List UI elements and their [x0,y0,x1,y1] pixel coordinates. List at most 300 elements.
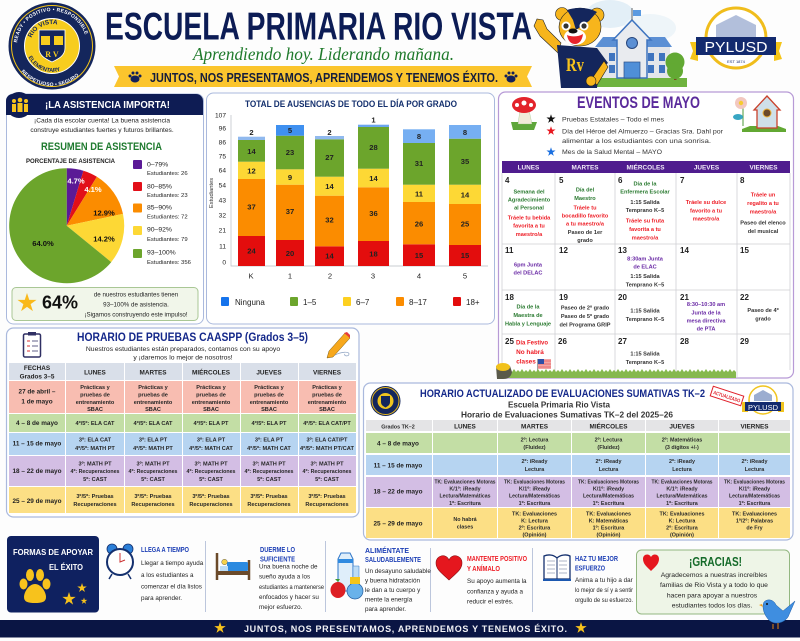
stacked bar 1 [276,125,304,266]
CAASPP row: 11-15 mayo: 4º/5º: MATH PT [75,446,115,452]
y axis: 54 [219,182,226,190]
stacked bar 5: 14 [461,190,470,200]
CAASPP row: 27 abril: Prácticas y [254,385,285,391]
events day 4: favorita a tu [513,224,545,230]
banner: JUNTOS, NOS PRESENTAMOS, APRENDEMOS Y TENEMOS ÉXITO. [150,70,498,85]
district logo [690,8,782,68]
stacked bar 5: 8 [463,128,467,137]
TK-2 row: 18-22 mayo: 18 – 22 de mayo [373,488,423,496]
icon: pencil [327,332,350,358]
icon: milk and apple [330,553,363,599]
pie legend: 0–79% [147,162,168,168]
events day 25: Día Festivo [516,340,548,346]
CAASPP row: 11-15 mayo: 3º: ELA PT [139,438,168,444]
events day 6: favorita a tu [629,227,661,233]
stacked bar K: 24 [247,246,256,256]
TK-2 row: 18-22 mayo: 1º: Escritura [666,501,699,507]
stacked bar K: 2 [249,128,254,137]
CAASPP row: 11-15 mayo: 4º/5º: MATH CAT [189,446,233,452]
TK-2 row: 11-15 mayo: Lectura [599,467,619,473]
TK-2 row: 18-22 mayo: Lectura/Matemáticas [656,494,708,500]
TK-2 row: 11-15 mayo: Lectura [525,467,545,473]
TK-2 row: 18-22 mayo: TK: Evaluaciones Motoras [724,480,785,486]
CAASPP row: 27 abril: entrenamiento [76,400,115,406]
events day 6: Día de la [633,182,657,188]
events day 5: Maestro [574,196,596,202]
TK-2 row: 25-29 mayo: K: Lectura [669,518,696,524]
pie chart: 4.1% [84,185,102,194]
TK-2 row: 25-29 mayo: 1º: Escritura [593,526,625,532]
mascot [534,8,608,88]
CAASPP row: 27 abril: pruebas de [138,392,168,398]
TK-2 header row: Grados TK–2 [381,424,415,430]
stacked bar K: 14 [247,147,256,156]
events day 13: de ELAC [633,264,657,270]
CAASPP row: 18-22 mayo: 5º: CAST [83,477,107,483]
CAASPP subtitle: Nuestros estudiantes están preparados, contamos con su apoyo [86,346,280,353]
events day 8: Paseo del elenco [740,220,786,226]
day numbers: 8 [740,176,745,185]
tip: eat healthy: mente la energía [365,596,413,604]
day numbers: 6 [618,176,623,185]
CAASPP header row [20,365,342,380]
CAASPP row: 25-29 mayo [12,494,349,508]
CAASPP row: 18-22 mayo: 3º: MATH PT [194,462,228,468]
events day 7: favorito a tu [690,208,723,214]
stacked bar 5 [449,125,481,266]
pie legend: 80–85% [147,184,172,190]
CAASPP row: 25-29 mayo: 3º/5º: Pruebas [308,494,346,500]
stacked bar 4: 15 [415,251,424,260]
tip: best effort: HAZ TU MEJOR [575,556,618,563]
stacked bar 3: 28 [369,143,378,152]
CAASPP row: 25-29 mayo: Recuperaciones [131,502,175,508]
small district logo: PYLUSD [748,403,779,412]
CAASPP row: 27 abril: entrenamiento [134,400,173,406]
events day 20 [626,308,664,323]
CAASPP row: 27 abril: entrenamiento [250,400,289,406]
CAASPP row: 18-22 mayo: 3º: MATH PT [310,462,344,468]
tip: stay positive: MANTENTE POSITIVO [467,556,527,563]
CAASPP row: 27 abril: Prácticas y [312,385,343,391]
TK-2 row: 25-29 mayo: TK: Evaluaciones [660,512,704,518]
events day 6: Enfermera Escolar [620,190,671,196]
CAASPP row: 18-22 mayo: 4º: Recuperaciones [302,469,352,475]
stacked bar 3: 14 [369,174,378,183]
TK-2 row: 18-22 mayo: K/1º: iReady [593,486,624,492]
stacked bar 4: 31 [415,159,424,168]
day numbers: 15 [740,246,749,255]
CAASPP row: 27 abril: SBAC [319,407,335,413]
events list: Día del Héroe del Almuerzo – Gracias Sra. Dahl por [562,128,724,136]
TK-2 header row: JUEVES [669,424,695,430]
callout: 64 percent: ¡Sigamos construyendo este impulso! [84,312,188,318]
stacked bar 5: 25 [461,220,470,228]
CAASPP row: 11-15 mayo [13,438,355,452]
panel: thanks: ¡GRACIAS! [689,555,742,569]
pie chart: 12.9% [93,208,115,218]
events day 7: Tráele su dulce [686,200,726,206]
panel: thanks: hacen para apoyar a nuestros [667,592,758,600]
tip: best effort [543,555,633,604]
tip: stay positive: Y ANÍMALO [467,564,500,573]
tip: on time: LLEGA A TIEMPO [141,547,189,554]
stacked bar 1: 37 [286,207,294,216]
CAASPP row: 27 abril: SBAC [203,407,219,413]
TK-2 row: 18-22 mayo: TK: Evaluaciones Motoras [578,480,639,486]
calendar: VIERNES [749,164,778,172]
calendar: JUEVES [694,164,720,172]
small district logo [742,386,784,414]
events day 25: clases [516,358,536,366]
events day 6: Temprano K–5 [626,208,664,214]
x axis labels: K [248,272,254,280]
events day 8 [740,192,786,235]
small school logo [370,386,400,416]
CAASPP row: 4-8 mayo: 4º/5º: ELA PT [194,421,229,427]
day numbers: 21 [680,293,689,302]
CAASPP header row: Grados 3–5 [20,374,55,380]
icon: open book [543,555,571,581]
TK-2 row: 11-15 mayo: Lectura [672,467,693,473]
stacked bar 1: 20 [286,249,294,258]
CAASPP row: 27 abril: 1 de mayo [21,398,53,406]
events day 19: Paseo de 5º grado [561,314,610,320]
school logo: ELEMENTARY [28,56,60,72]
tip: sleep: SUFICIENTE [260,556,295,564]
day numbers: 27 [618,337,627,346]
chart legend: 1–5 [303,298,317,307]
y axis: Estudiantes [209,178,215,208]
events day 25: No habrá [516,349,544,356]
TK-2 header row: LUNES [454,424,477,430]
CAASPP row: 18-22 mayo [12,462,352,483]
events day 19 [560,306,611,328]
CAASPP row: 27 abril: pruebas de [254,392,284,398]
events list: alimentar a los estudiantes con una sonrisa. [562,138,711,145]
day numbers: 11 [505,246,514,255]
stacked bar 3 [358,116,389,266]
stacked bar 4 [403,129,435,266]
events day 21: 8:30–10:30 am [687,302,725,308]
tip: eat healthy: SALUDABLEMENTE [365,557,421,564]
tip: on time: comenzar el día listos [141,584,202,590]
events day 4: Tráele tu bebida [508,216,551,222]
panel: absences chart [206,93,494,324]
district logo: PYLUSD [704,39,768,56]
calendar [502,161,790,378]
events day 8: maestro/a [750,210,777,216]
CAASPP row: 27 abril: SBAC [145,407,161,413]
events list [546,114,724,156]
day numbers: 4 [505,176,510,185]
events day 13: 8:30am Junta [627,256,664,262]
events day 5: Tráele tu [573,206,597,212]
TK-2 row: 11-15 mayo: 2º: iReady [596,459,621,465]
TK-2 row: 18-22 mayo: K/1º: iReady [739,486,770,492]
stacked bar K [238,128,265,266]
events day 21 [687,302,726,332]
pie legend: Estudiantes: 72 [147,214,188,220]
CAASPP row: 25-29 mayo: 3º/5º: Pruebas [76,494,114,500]
stacked bar 1: 9 [288,173,292,182]
TK-2 row: 18-22 mayo: K/1º: iReady [449,486,481,492]
CAASPP row: 4-8 mayo: 4º/5º: ELA CAT [76,421,115,427]
events day 22: grado [755,316,771,322]
day numbers: 19 [559,293,568,302]
tip: sleep [217,547,324,611]
CAASPP row: 27 abril: pruebas de [312,392,342,398]
icon: heart small [643,555,659,571]
title: ESCUELA PRIMARIA RIO VISTA [105,6,532,48]
day numbers: 5 [559,176,564,185]
school logo: READY • POSITIVO • RESPONSIBLE [14,8,88,42]
CAASPP row: 27 abril: entrenamiento [192,400,231,406]
calendar: MIÉRCOLES [626,162,665,172]
TK-2 row: 18-22 mayo: TK: Evaluaciones Motoras [434,480,496,486]
events day 27: Temprano K–5 [626,360,664,366]
CAASPP row: 27 abril: Prácticas y [196,385,227,391]
TK-2 row: 18-22 mayo: Lectura/Matemáticas [440,494,490,500]
day numbers: 26 [558,337,567,346]
TK-2 header row [381,422,769,430]
events day 18 [505,304,551,328]
CAASPP row: 4-8 mayo: 4º/5º: ELA CAT/PT [303,421,351,427]
CAASPP row: 18-22 mayo: 3º: MATH PT [78,462,112,468]
events day 25 [516,340,548,366]
CAASPP subtitle: y ¡daremos lo mejor de nosotros! [133,354,233,362]
CAASPP row: 27 abril: pruebas de [196,392,226,398]
CAASPP row: 18-22 mayo: 4º: Recuperaciones [70,469,120,475]
CAASPP row: 27 abril: 27 de abril – [19,388,56,396]
y axis: 75 [219,154,226,160]
TK-2 subtitle: Escuela Primaria Rio Vista [508,400,611,410]
stamp: updated [710,386,744,406]
x axis labels: 5 [463,272,467,280]
events day 19: Paseo de 2º grado [561,306,610,312]
icon: birdhouse and flower [733,96,786,132]
CAASPP row: 25-29 mayo: Recuperaciones [247,502,291,508]
tip: sleep: estudiantes a mantenerse [259,584,324,591]
events day 4: Agradecimiento [508,198,551,204]
calendar: LUNES [518,164,540,172]
events day 18: Habla y Lenguaje [505,322,551,328]
panel: May events [496,92,794,379]
TK-2 row: 4-8 mayo: 4 – 8 de mayo [377,440,419,448]
CAASPP table [9,363,356,513]
CAASPP row: 11-15 mayo: 3º: ELA CAT [79,438,112,444]
CAASPP row: 27 abril: entrenamiento [308,400,347,406]
panel: ways to support: FORMAS DE APOYAR [13,547,94,557]
tip: stay positive: Su apoyo aumenta la [467,578,527,585]
events day 6: Tráele su fruta [626,218,665,224]
icon: heart [436,556,462,580]
CAASPP row: 27 abril: Prácticas y [80,385,111,391]
tip: eat healthy: ALIMÉNTATE [365,546,409,555]
stacked bar 3: 36 [369,209,378,218]
x axis labels: 4 [417,272,421,280]
CAASPP row: 18-22 mayo: 4º: Recuperaciones [128,469,178,475]
events day 4: Semana del [513,190,545,196]
TK-2 row: 25-29 mayo: 2º: Escritura [666,526,699,532]
CAASPP row: 18-22 mayo: 5º: CAST [199,477,223,483]
CAASPP row: 25-29 mayo: 3º/5º: Pruebas [192,494,230,500]
panel: TK-2 schedule [364,383,793,540]
pie chart: 64.0% [32,239,54,248]
events day 11 [514,262,543,276]
events day 8: regalito a tu [747,201,779,207]
pie legend: 85–90% [147,204,172,212]
CAASPP row: 25-29 mayo: Recuperaciones [73,502,117,508]
y axis: 21 [219,228,226,234]
icon: paw left [128,72,142,82]
TK-2 header row: MIÉRCOLES [590,422,628,430]
events day 5 [562,188,609,244]
stacked bar 2: 32 [325,216,334,224]
CAASPP row: 4-8 mayo: 4º/5º: ELA PT [252,421,287,427]
y axis: 64 [219,168,226,174]
intro text: ¡Cada día escolar cuenta! La buena asistencia [34,118,170,124]
events day 20: 1:15 Salida [630,308,660,314]
events list: Pruebas Estatales – Todo el mes [562,116,665,124]
CAASPP row: 11-15 mayo: 3º: ELA PT [197,438,226,444]
stacked bar K: 12 [247,166,256,176]
panel: ways to support: EL ÉXITO [49,562,83,572]
tip: stay positive: confianza y ayuda a [467,588,524,596]
CAASPP header row: VIERNES [313,370,342,376]
panel: CAASPP schedule [6,328,359,517]
tip: on time: a los estudiantes a [141,572,194,579]
y axis: 11 [219,244,226,250]
events day 6: maestro/a [632,236,659,242]
x axis labels: 2 [328,272,332,280]
pie chart: 4.7% [67,176,85,186]
school logo: RIO VISTA [28,20,58,38]
stacked bar 2 [315,128,344,266]
pie chart title: PORCENTAJE DE ASISTENCIA [26,158,116,165]
TK-2 subtitle [461,400,674,420]
TK-2 row: 25-29 mayo: TK: Evaluaciones [512,512,557,518]
stacked bar 4: 8 [417,132,421,141]
stacked bar 5: 15 [461,251,470,260]
callout: 64 percent: 64% [42,292,78,312]
events list: Mes de la Salud Mental – MAYO [562,149,662,156]
TK-2 row: 25-29 mayo: (Opinión) [670,532,694,538]
TK-2 row: 18-22 mayo: 1º: Escritura [739,501,771,507]
events day 21: mesa directiva [687,318,726,324]
y axis: 32 [219,212,226,220]
CAASPP subtitle [86,346,280,362]
events day 4: maestro/a [516,232,543,238]
icon: paw right [504,72,518,82]
CAASPP row: 18-22 mayo: 3º: MATH PT [252,462,286,468]
stacked bar 5: 35 [461,157,470,166]
y axis: 43 [219,198,226,204]
school logo [8,2,96,90]
y axis: 107 [215,112,226,120]
CAASPP row: 4-8 mayo: 4º/5º: ELA CAT [134,421,173,427]
tip: best effort: lo mejor de sí y a sentir [575,587,633,594]
chart legend: 8–17 [409,298,427,307]
chart legend [221,297,480,307]
CAASPP row: 18-22 mayo: 3º: MATH PT [136,462,170,468]
icon: bluebird [759,600,795,629]
events day 19: del Programa GRIP [560,322,611,328]
stacked bar K: 37 [247,202,256,212]
CAASPP row: 11-15 mayo: 4º/5º: MATH PT/CAT [300,446,355,452]
events day 8: Tráele un [751,192,776,198]
CAASPP header row: FECHAS [24,365,51,372]
CAASPP row: 25-29 mayo: Recuperaciones [305,502,349,508]
tip: on time [107,544,204,602]
footer: JUNTOS, NOS PRESENTAMOS, APRENDEMOS Y TENEMOS ÉXITO. [244,624,567,634]
TK-2 row: 11-15 mayo: 2º: iReady [669,459,695,465]
x axis labels [248,272,467,280]
pie legend: Estudiantes: 356 [147,260,192,266]
intro text [30,118,174,134]
day numbers: 22 [740,293,749,302]
events day 5: grado [577,238,593,244]
y axis: 0 [222,260,226,266]
TK-2 row: 18-22 mayo: K/1º: iReady [519,486,550,492]
events day 21: de PTA [697,326,715,332]
TK-2 row: 4-8 mayo [377,438,702,451]
TK-2 row: 25-29 mayo [373,512,777,538]
chart legend: 6–7 [356,298,370,307]
events day 11: 6pm Junta [514,262,543,268]
TK-2 table [366,420,790,538]
tip: sleep: DUERME LO [260,547,295,554]
tip: on time: Llegar a tiempo ayuda [141,560,204,567]
events day 27 [626,352,664,366]
tip: eat healthy: y buena hidratación [365,578,420,584]
TK-2 row: 25-29 mayo: de Fry [746,526,763,532]
CAASPP row: 18-22 mayo: 18 – 22 de mayo [12,468,62,475]
pie legend: 90–92% [147,226,172,234]
stacked bar 1: 5 [288,126,293,135]
pie legend: Estudiantes: 23 [147,193,188,199]
events day 7: maestro/a [693,216,720,222]
TK-2 row: 11-15 mayo [374,459,767,473]
TK-2 row: 25-29 mayo: (Opinión) [597,532,621,538]
chart title: TOTAL DE AUSENCIAS DE TODO EL DÍA POR GRADO [245,99,457,109]
CAASPP row: 27 abril: SBAC [87,407,103,413]
icon: clipboard [24,332,40,357]
day numbers: 13 [618,246,627,255]
CAASPP row: 27 abril [19,385,347,413]
callout: 64 percent [12,288,198,320]
icon: stars [62,583,87,605]
events day 4 [508,190,551,238]
panel: thanks: Agradecemos a nuestras increíbles [661,572,768,579]
calendar: MARTES [572,164,599,172]
tagline: Aprendiendo hoy. Liderando mañana. [192,44,454,64]
events day 6 [620,182,671,242]
tip: eat healthy: Un desayuno saludable [365,568,431,575]
CAASPP header row: JUEVES [256,370,282,376]
TK-2 row: 18-22 mayo: 1º: Escritura [593,501,625,507]
panel: thanks [636,550,790,614]
CAASPP row: 18-22 mayo: 5º: CAST [141,477,165,483]
TK-2 row: 11-15 mayo: Lectura [745,467,765,473]
pie legend: Estudiantes: 26 [147,171,188,177]
y axis [209,112,488,266]
CAASPP row: 4-8 mayo: 4 – 8 de mayo [16,420,58,427]
tip: sleep: Una buena noche de [259,564,318,570]
TK-2 row: 4-8 mayo: 2º: Lectura [521,438,549,444]
TK-2 row: 25-29 mayo: clases [457,524,473,530]
tip: eat healthy: le dan a tu cuerpo y [365,587,421,594]
